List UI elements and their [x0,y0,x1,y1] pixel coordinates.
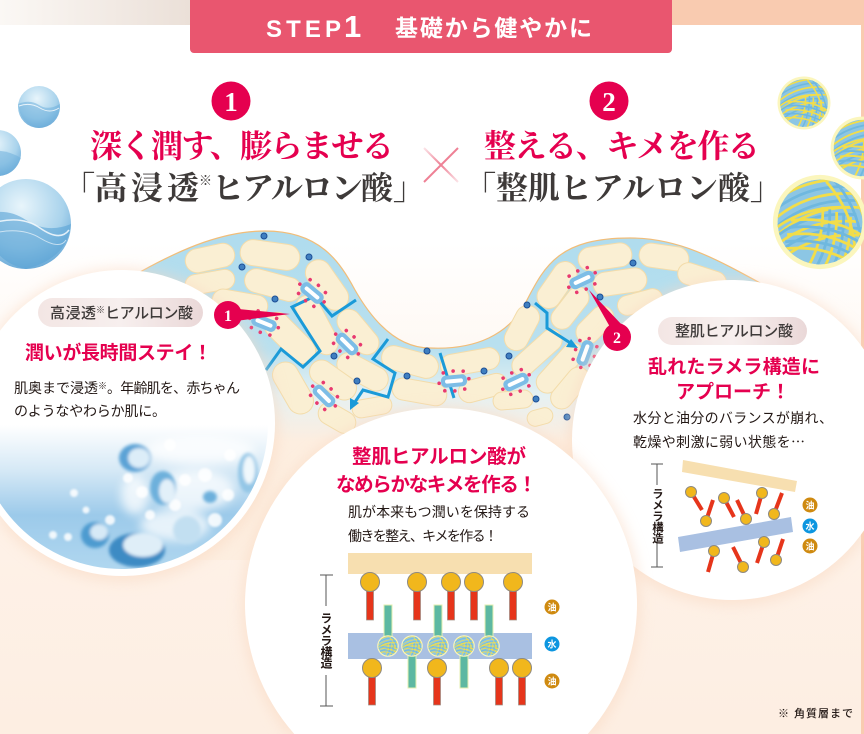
subheading: 潤いが長時間ステイ！ [25,341,212,364]
number badge 1: 1 [224,87,238,117]
legend: 油 [805,540,815,552]
heading 1 dark line: 「 [63,170,95,206]
blue penetration arrows [266,296,578,410]
heading 2 red line: 整える、キメを作る [484,128,760,164]
callout 1: 1 [224,308,232,325]
body text: 水分と油分のバランスが崩れ、 [633,410,833,426]
heading 1 [63,82,425,206]
body text: のようなやわらか肌に。 [14,403,166,419]
subheading: なめらかなキメを作る！ [336,474,537,496]
icon: multiply sign [424,148,458,182]
upper lipids [360,572,522,620]
skin cross-section diagram [120,231,810,560]
icon: water bubbles [0,86,71,269]
heading 2 dark line: 「 [464,170,496,206]
number badge 2: 2 [602,87,616,117]
lamellar bracket [319,575,333,706]
water molecules [239,233,636,420]
panel: stratum hyaluronic acid right [569,279,864,605]
label pill: 高浸透 [50,305,96,322]
legend: 油 [547,602,557,612]
legend [802,498,818,554]
heading 1 dark line: ヒアルロン酸 [212,170,395,206]
body text: 肌奥まで浸透 [14,380,98,396]
legend: 水 [805,520,815,532]
label pill: 整肌ヒアルロン酸 [675,323,793,340]
disordered lamellar diagram: ラメラ構造 [651,488,664,545]
yarn balls [375,634,506,665]
label pill: ヒアルロン酸 [105,305,193,322]
step header: 基礎から健やかに [395,15,592,41]
skin cells [183,238,729,438]
panel: smooth texture center [242,407,640,734]
panel: high penetration hyaluronic acid [0,269,278,581]
top band left [0,0,190,25]
label pill [38,298,203,327]
subheading: アプローチ！ [676,381,790,403]
disordered lamellar diagram [651,460,818,572]
water photo [0,434,268,569]
body text [633,410,833,452]
body text [14,380,240,419]
subheading [648,356,820,403]
legend: 油 [547,676,557,686]
callout 1 [214,301,290,329]
lamellar bracket: ラメラ構造 [319,612,333,670]
body text: 働きを整え、キメを作る！ [348,528,498,544]
heading 2 dark line: 」 [750,170,782,206]
heading 1 dark line: ※ [199,173,212,188]
number badge 1 [212,82,250,120]
legend: 油 [805,500,815,510]
heading 2 dark line: 整肌ヒアルロン酸 [496,170,752,206]
lower lipids [362,658,532,705]
top band right [672,0,864,734]
ordered lamellar diagram [319,553,560,706]
body text: ※ [98,381,107,391]
hyaluronic acid molecules [244,262,602,416]
subheading: 整肌ヒアルロン酸が [352,445,526,468]
legend: 水 [547,638,557,650]
footnote: ※ 角質層まで [778,706,853,720]
label pill [658,317,807,345]
body text: 肌が本来もつ潤いを保持する [348,504,530,520]
number badge 2 [590,82,628,120]
legend [544,600,560,688]
icon: yarn balls [763,73,864,307]
subheading: 乱れたラメラ構造に [648,356,820,378]
heading 1 dark line: 」 [393,170,425,206]
body text: 乾燥や刺激に弱い状態を… [633,432,805,452]
heading 2 [464,82,782,206]
step header: 1 [344,9,361,44]
heading 1 dark line [63,170,425,206]
label pill: ※ [96,305,105,315]
subheading [336,445,537,496]
heading 1 dark line: 高浸透 [95,170,199,206]
step header [190,0,672,53]
heading 1 red line: 深く潤す、膨らませる [90,128,394,164]
step header: STEP [266,16,341,43]
hyaluronic acid rods [384,605,493,688]
callout 2 [589,290,631,351]
body text [348,504,530,544]
callout 2: 2 [613,330,621,347]
body text: 。年齢肌を、赤ちゃん [107,380,240,396]
